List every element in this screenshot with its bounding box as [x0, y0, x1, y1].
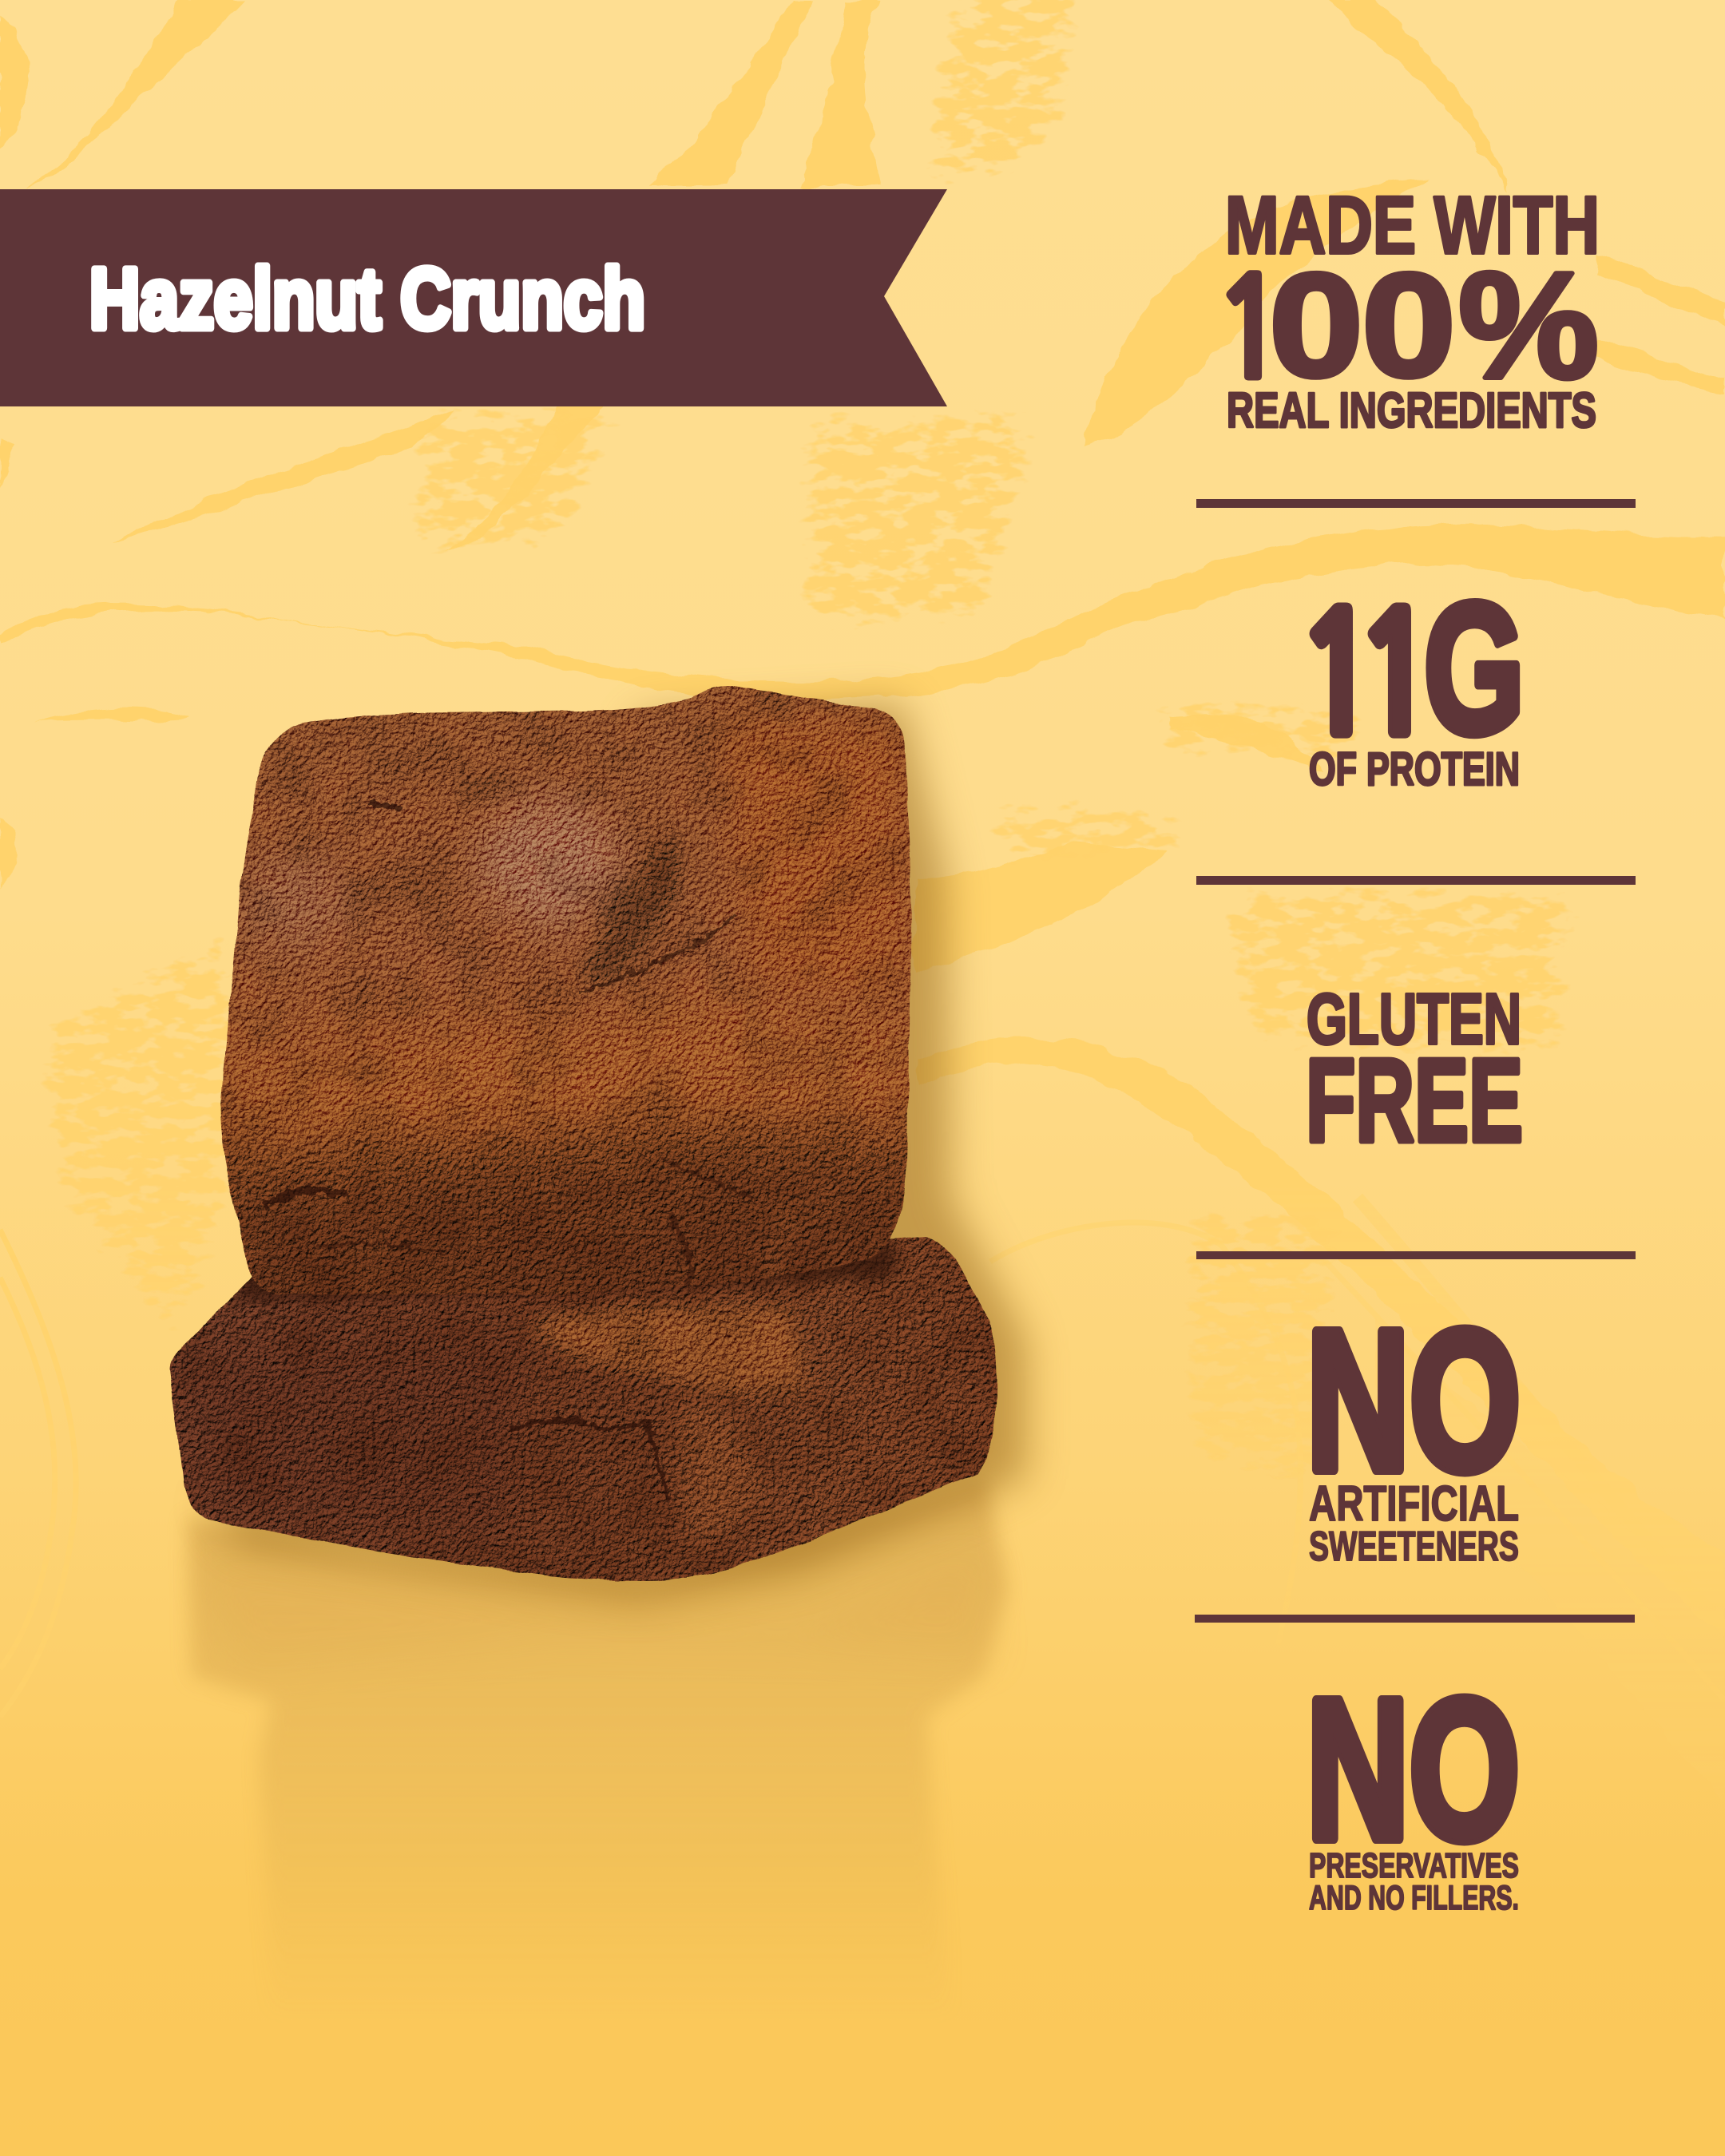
feature: made with 100% real ingredients — [1212, 180, 1600, 438]
feature: gluten free: FREE — [1306, 1035, 1523, 1167]
feature: no preservatives and no fillers: AND NO FILLERS. — [1309, 1879, 1519, 1917]
feature: no preservatives and no fillers: PRESERVATIVES — [1309, 1846, 1519, 1885]
feature: gluten free: GLUTEN — [1307, 980, 1521, 1060]
banner — [0, 189, 947, 406]
brownie reflection — [188, 1477, 1008, 2020]
orange right side glow — [719, 719, 910, 998]
feature: gluten free — [1306, 980, 1523, 1167]
background swirl pattern — [0, 0, 1725, 1480]
feature: no preservatives and no fillers: NO — [1307, 1658, 1520, 1881]
feature: made with 100% real ingredients: % — [1458, 241, 1599, 410]
feature: 11g of protein: OF PROTEIN — [1309, 743, 1520, 795]
feature: 11g of protein: 1 — [1354, 593, 1439, 758]
banner title: Hazelnut Crunch — [89, 250, 645, 347]
upper brownie — [200, 679, 926, 1326]
feature: no artificial sweeteners: SWEETENERS — [1309, 1524, 1519, 1570]
feature: made with 100% real ingredients: MADE WITH — [1225, 180, 1600, 271]
feature: no artificial sweeteners — [1307, 1289, 1521, 1570]
crumbly top of lower brownie — [527, 1308, 807, 1389]
feature: made with 100% real ingredients: 0 — [1269, 244, 1363, 408]
feature: 11g of protein: 1 — [1295, 593, 1381, 758]
feature: no artificial sweeteners: ARTIFICIAL — [1309, 1476, 1519, 1532]
feature: made with 100% real ingredients: 1 — [1212, 261, 1288, 398]
brownie shadow — [208, 703, 1026, 1601]
cracks — [268, 803, 751, 1286]
pale sheen — [479, 799, 623, 926]
feature: 11g of protein: G — [1424, 565, 1525, 772]
divider — [1196, 876, 1636, 885]
feature column — [1195, 180, 1636, 1917]
outline swirl lines — [0, 1194, 1474, 1466]
feature: 11g of protein — [1295, 565, 1525, 795]
divider — [1195, 1615, 1635, 1623]
textured paint patches — [32, 0, 1581, 1501]
feature: no artificial sweeteners: NO — [1307, 1289, 1521, 1512]
feature: made with 100% real ingredients: REAL INGREDIENTS — [1227, 383, 1596, 438]
feature: no preservatives and no fillers — [1307, 1658, 1520, 1917]
feature: made with 100% real ingredients: 0 — [1362, 244, 1456, 408]
crease shadow — [583, 838, 679, 982]
lower brownie — [152, 1230, 1014, 1597]
divider — [1196, 499, 1636, 508]
front face — [200, 1150, 926, 1326]
front ridge — [224, 998, 906, 1150]
divider — [1196, 1251, 1636, 1259]
